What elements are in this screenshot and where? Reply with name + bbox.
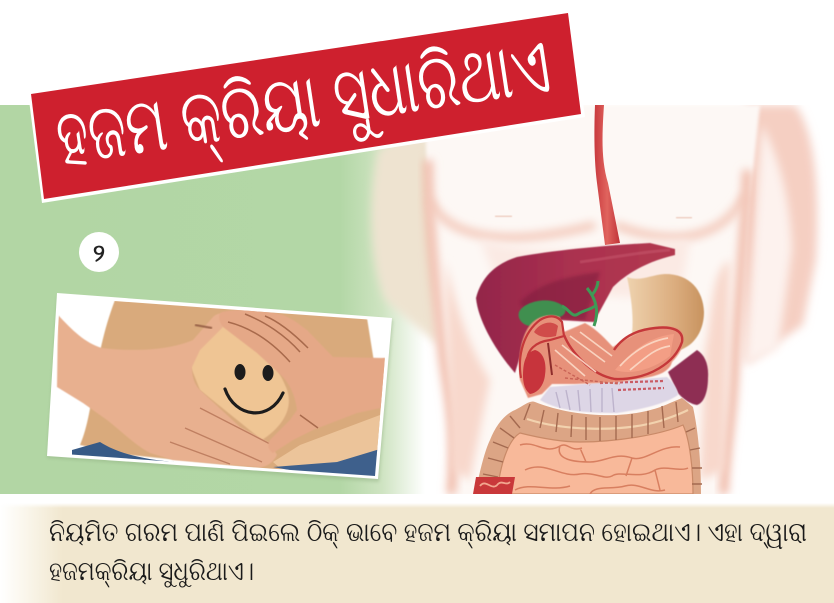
lower right belly: [273, 415, 380, 468]
small intestine folds: [515, 444, 688, 494]
stomach outer: [627, 274, 704, 350]
liver: [476, 243, 675, 373]
bottom text band: [0, 503, 834, 603]
belly: [190, 325, 289, 440]
number badge: ୨: [93, 240, 105, 267]
bottom text band: ହଜମକ୍ରିୟା ସୁଧୁରିଥାଏ।: [49, 556, 254, 587]
right arm: [745, 105, 817, 365]
number badge: [79, 232, 119, 272]
jeans: [273, 450, 378, 476]
large intestine: [475, 398, 701, 494]
right hand: [219, 310, 385, 453]
illustration: torso with digestive organs: [372, 105, 817, 500]
cecum and appendix: [473, 477, 515, 494]
torso skin: [372, 105, 817, 500]
left hand: [57, 314, 277, 467]
pancreas and duodenum: [519, 315, 684, 398]
contour shading: [428, 160, 453, 494]
gallbladder and bile duct: [519, 281, 598, 326]
green background panel: [0, 105, 425, 494]
omentum: [540, 377, 678, 413]
left arm: [372, 120, 438, 345]
torso skin: [80, 300, 385, 470]
spleen: [668, 350, 708, 405]
trunk: [425, 105, 760, 500]
smiley: [225, 364, 283, 413]
esophagus: [594, 105, 620, 245]
title banner: [28, 9, 585, 203]
photo: hands on belly with smiley: [47, 293, 393, 482]
